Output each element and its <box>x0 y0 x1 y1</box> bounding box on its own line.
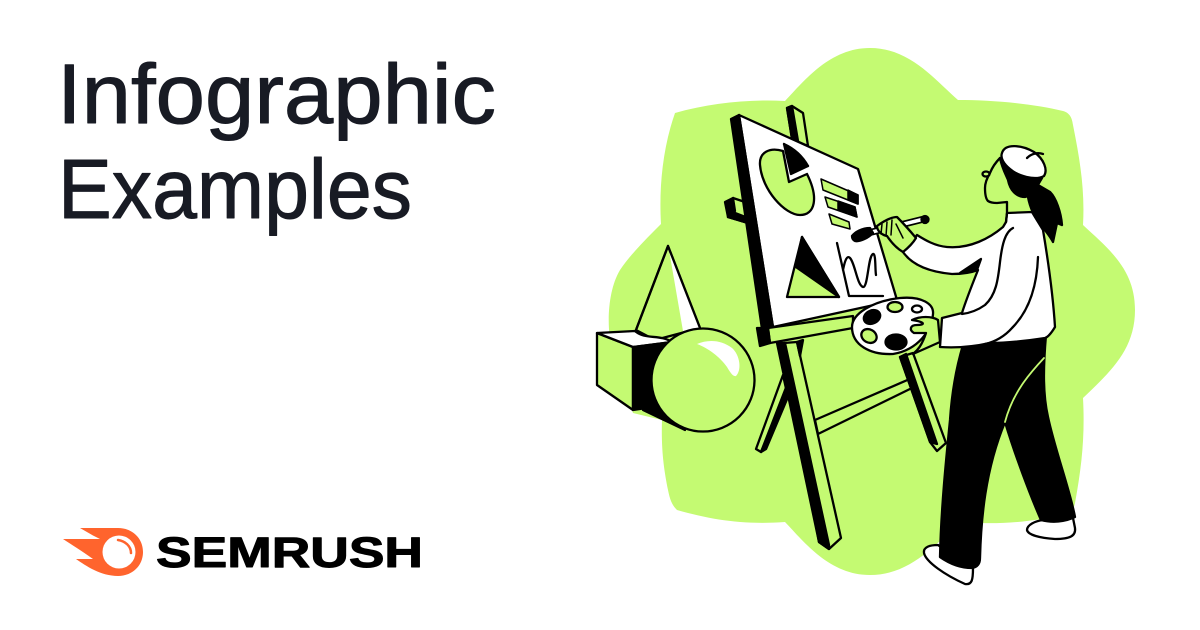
title <box>57 47 496 236</box>
easel top post <box>787 106 808 146</box>
line chart <box>837 243 883 296</box>
head and face <box>982 146 1062 242</box>
shoe: back <box>1027 518 1075 539</box>
finger lines <box>881 220 903 238</box>
trousers <box>940 335 1075 568</box>
paintbrush <box>852 216 928 241</box>
shoe: front <box>924 545 973 584</box>
triangle chart <box>787 237 839 297</box>
cube <box>597 331 685 430</box>
illustration: painter <box>852 146 1075 584</box>
shelf <box>757 316 853 346</box>
ponytail <box>1028 185 1062 242</box>
illustration: easel <box>725 106 946 549</box>
back left leg <box>756 375 790 452</box>
icon: flame <box>63 528 143 576</box>
illustration: still life <box>597 246 754 432</box>
title: Infographic <box>57 47 496 141</box>
cone <box>636 246 700 340</box>
logo: Semrush <box>63 528 423 577</box>
beret <box>1001 146 1046 178</box>
bar list <box>821 179 858 229</box>
sweater and arms <box>903 212 1055 347</box>
hand holding palette <box>911 317 940 354</box>
easel left peg <box>725 198 748 223</box>
pie chart <box>760 144 814 215</box>
hand holding brush <box>877 217 916 252</box>
main front leg <box>777 340 841 549</box>
palette <box>852 298 933 354</box>
background blob <box>609 48 1135 575</box>
cross brace <box>815 378 914 434</box>
right leg <box>900 353 946 451</box>
canvas board <box>731 115 897 329</box>
sphere <box>652 328 754 432</box>
wordmark: SEMRUSH <box>156 529 423 577</box>
title: Examples <box>58 142 412 236</box>
